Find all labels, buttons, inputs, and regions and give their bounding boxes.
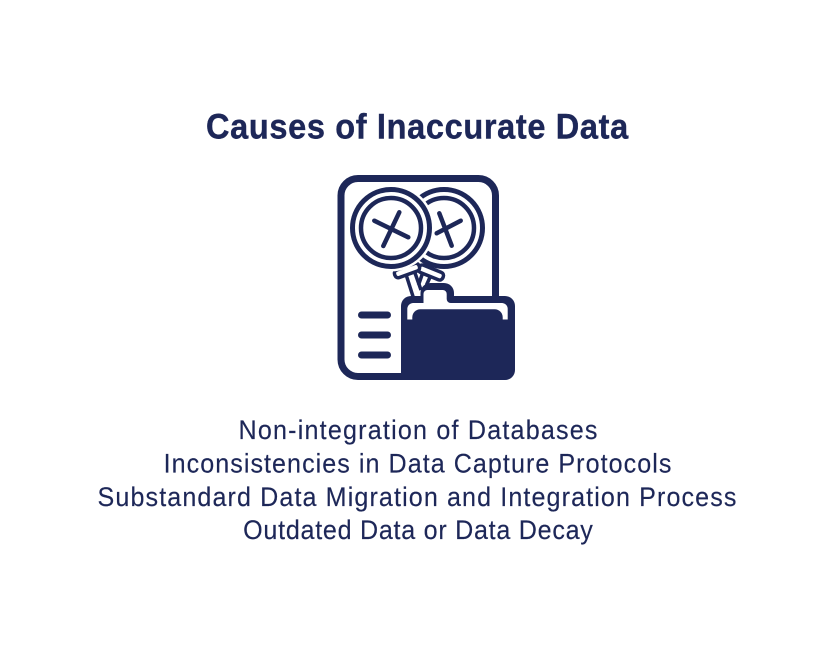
- icon part: text lines: [362, 315, 388, 355]
- list of causes: [98, 414, 736, 545]
- icon part: left magnifier: [348, 184, 434, 298]
- cause 4: Outdated Data or Data Decay: [243, 514, 593, 545]
- icon part: document page: [341, 178, 496, 376]
- title: Causes of Inaccurate Data: [206, 107, 628, 147]
- icon part: right magnifier: [406, 190, 482, 285]
- icon part: folder: [401, 283, 515, 380]
- cause 1: Non-integration of Databases: [239, 414, 597, 445]
- cause 3: Substandard Data Migration and Integration Process: [98, 481, 736, 512]
- cause 2: Inconsistencies in Data Capture Protocols: [164, 448, 671, 479]
- icon: document with magnifiers and folder: [341, 178, 515, 380]
